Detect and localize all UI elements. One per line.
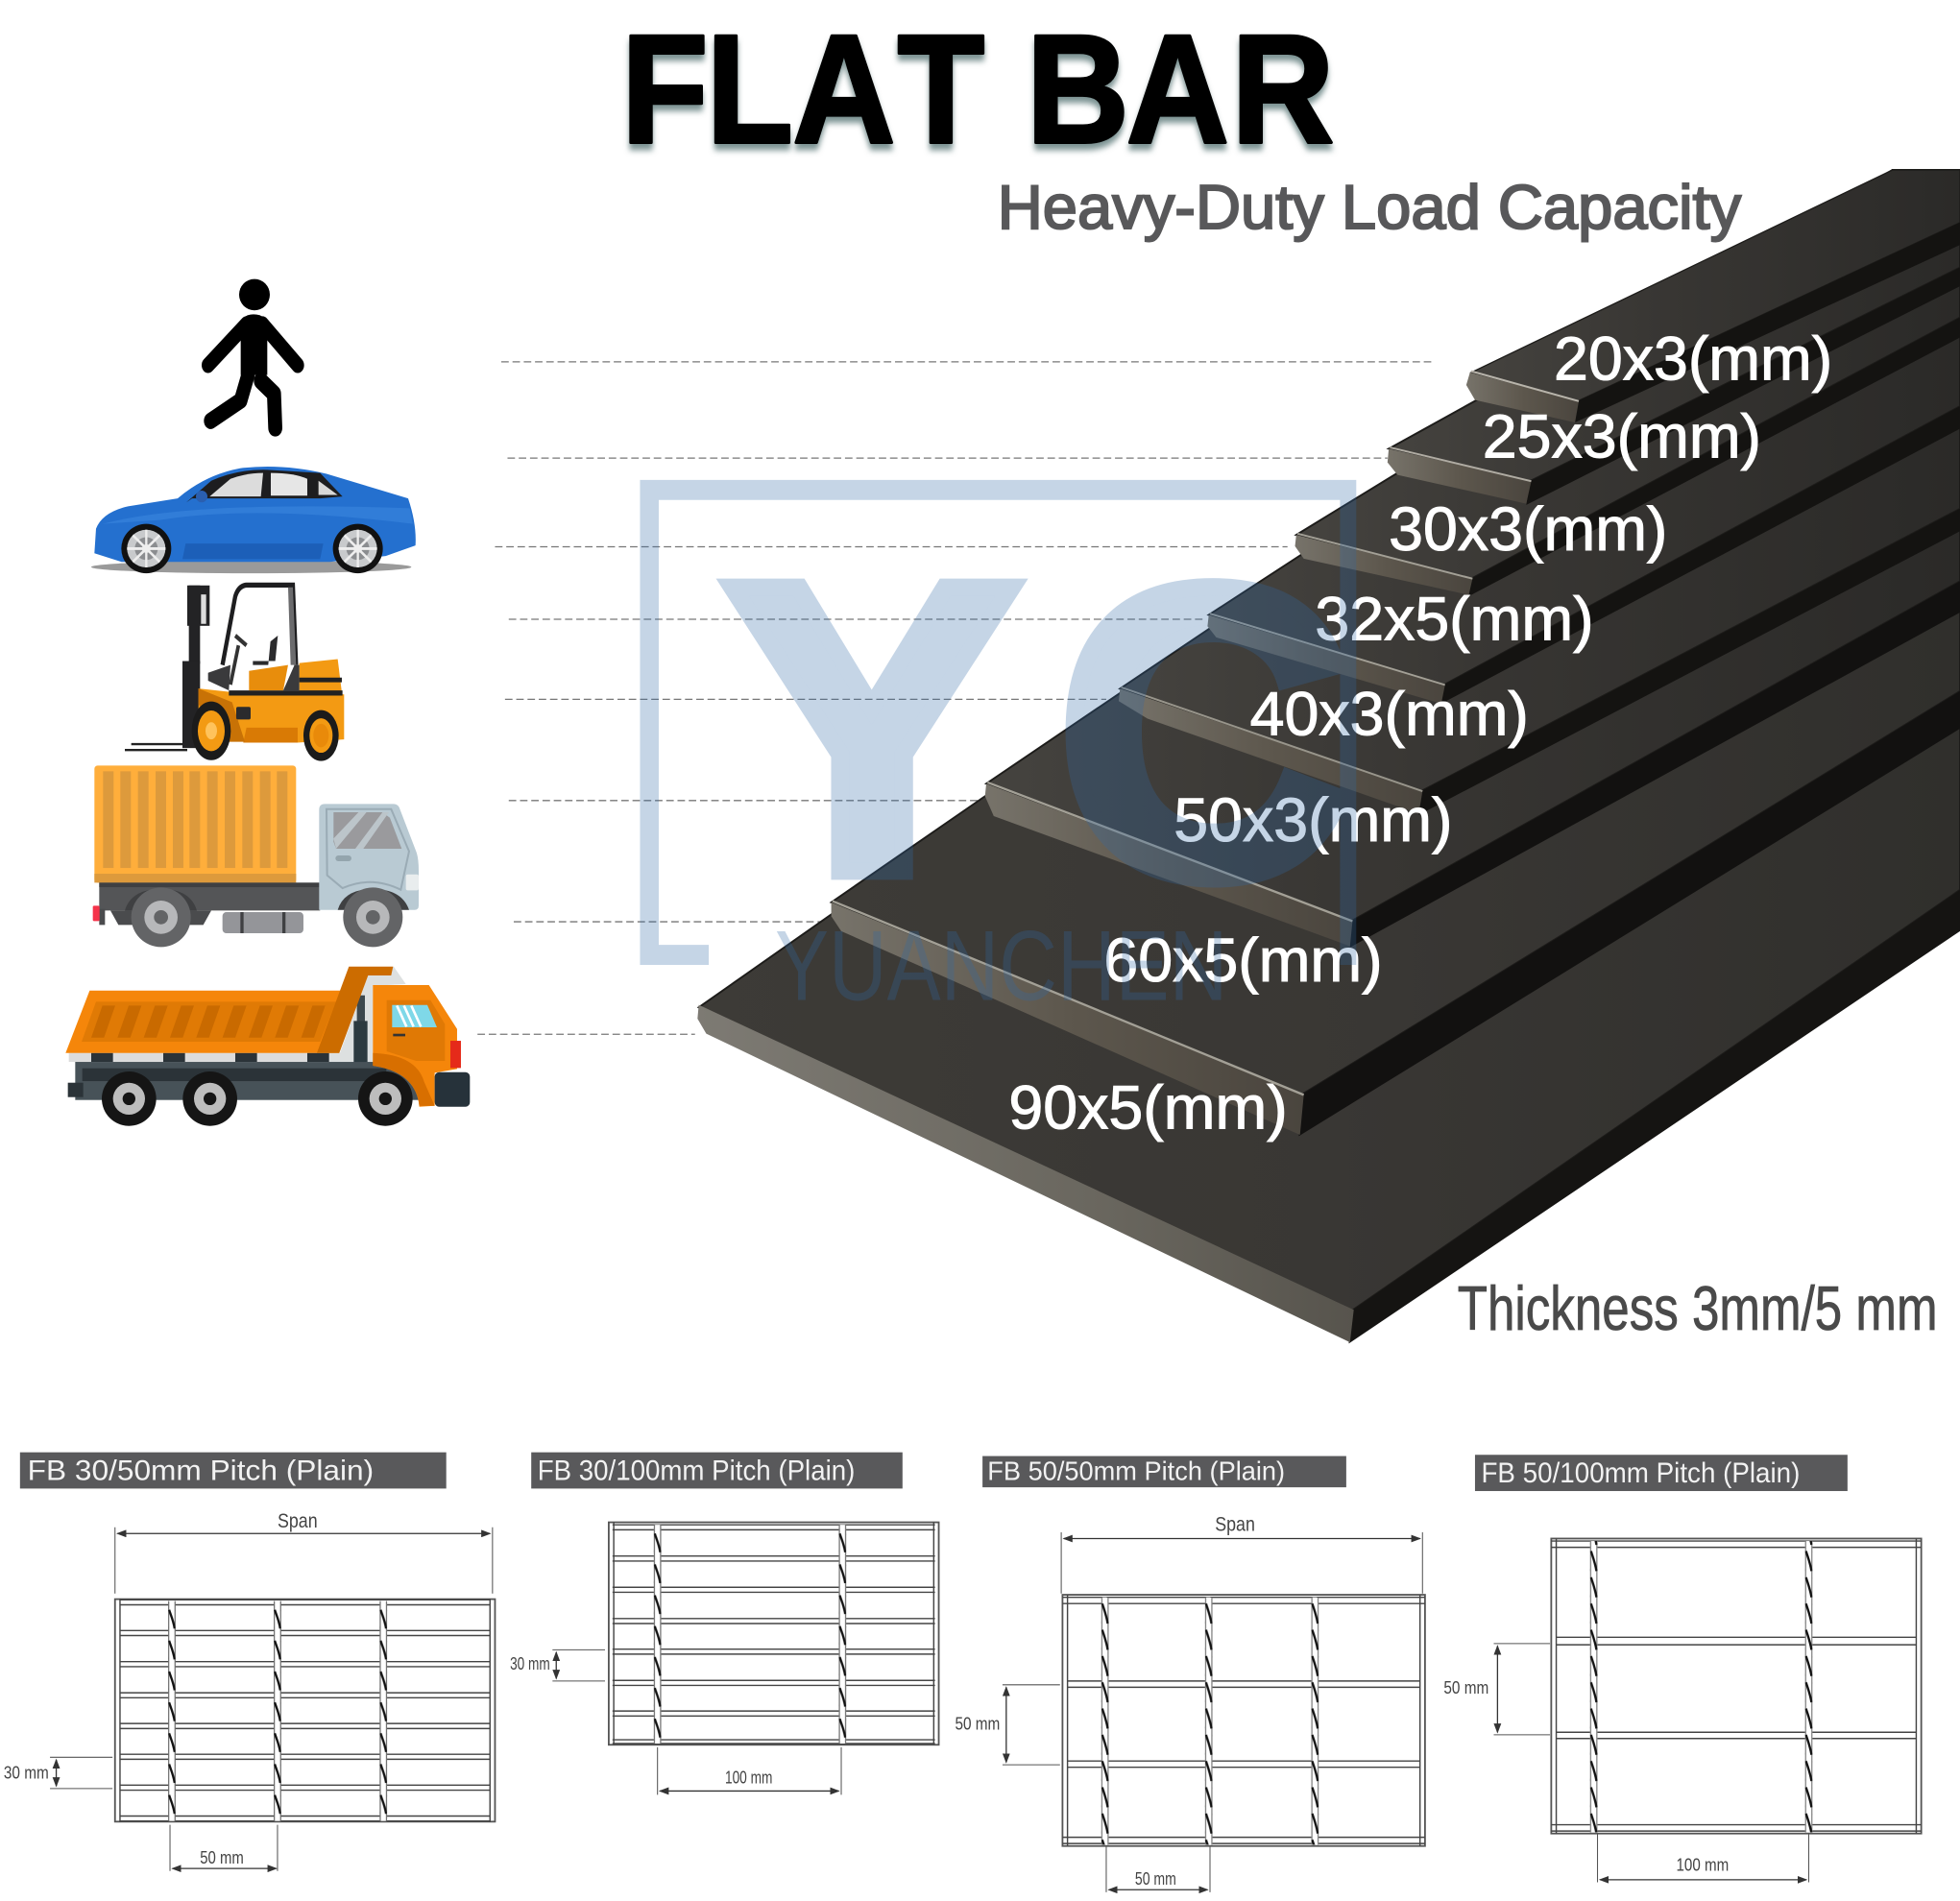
size labels: 60x5(mm) — [1103, 926, 1383, 995]
bar: 20x3 — [1466, 170, 1960, 422]
size labels: 40x3(mm) — [1250, 679, 1529, 748]
bar: 25x3 — [1388, 170, 1960, 505]
load reference dashed lines — [477, 362, 1435, 1034]
panel: FB 30/50 heading — [20, 1453, 447, 1488]
watermark logo: Y — [725, 498, 1019, 959]
size labels: 25x3(mm) — [1483, 401, 1761, 470]
diagram: 50/50mm grating: 50 mm — [1135, 1869, 1176, 1889]
diagram: 50/100mm grating: 100 mm — [1677, 1856, 1729, 1875]
bar: 60x5 — [832, 170, 1960, 1136]
diagram: 30/50mm grating: 30 mm — [4, 1763, 49, 1782]
panel: FB 30/50 heading: FB 30/50mm Pitch (Plain) — [28, 1455, 374, 1486]
bar: 30x3 — [1295, 170, 1960, 596]
size labels: 90x5(mm) — [1008, 1073, 1288, 1143]
panel: FB 50/100 heading: FB 50/100mm Pitch (Plain) — [1481, 1457, 1800, 1489]
diagram: 30/100mm grating: 30 mm — [510, 1654, 550, 1673]
panel: FB 50/50 heading: FB 50/50mm Pitch (Plain) — [987, 1456, 1285, 1485]
icon: forklift — [125, 585, 344, 761]
diagram: 30/50mm grating: Span — [278, 1510, 318, 1532]
size labels: 30x3(mm) — [1389, 494, 1667, 564]
size labels — [1008, 325, 1832, 1143]
diagram: 50/50mm grating: Span — [1215, 1514, 1255, 1536]
diagram: 50/50mm grating — [955, 1514, 1425, 1892]
icon: dump truck — [65, 967, 470, 1126]
title: FLAT BAR — [621, 3, 1334, 176]
watermark logo: C — [1057, 502, 1351, 963]
watermark logo — [640, 480, 1356, 1022]
diagram: 30/50mm grating — [4, 1510, 495, 1871]
diagram: 30/100mm grating: 100 mm — [725, 1769, 772, 1788]
icon: walking person — [208, 279, 298, 428]
diagram: 50/100mm grating — [1443, 1538, 1922, 1882]
watermark logo: YUANCHEN — [775, 910, 1227, 1022]
size labels: 50x3(mm) — [1174, 785, 1453, 854]
panel: FB 30/100 heading: FB 30/100mm Pitch (Plain) — [538, 1455, 855, 1486]
stack of flat bars — [697, 170, 1960, 1343]
diagram: 50/100mm grating: 50 mm — [1443, 1678, 1488, 1697]
subtitle: Heavy-Duty Load Capacity — [998, 172, 1742, 242]
bar: 90x5 — [697, 170, 1960, 1343]
diagram: 30/100mm grating — [510, 1523, 939, 1794]
icon: container truck — [93, 765, 419, 947]
bar: 32x5 — [1207, 170, 1960, 704]
bar: 50x3 — [985, 170, 1960, 948]
icon: blue car — [91, 467, 416, 573]
size labels: 20x3(mm) — [1554, 325, 1832, 394]
diagram: 30/50mm grating: 50 mm — [200, 1848, 244, 1867]
size labels: 32x5(mm) — [1315, 585, 1594, 654]
diagram: 50/50mm grating: 50 mm — [955, 1715, 1000, 1734]
bar: 40x3 — [1119, 170, 1960, 815]
